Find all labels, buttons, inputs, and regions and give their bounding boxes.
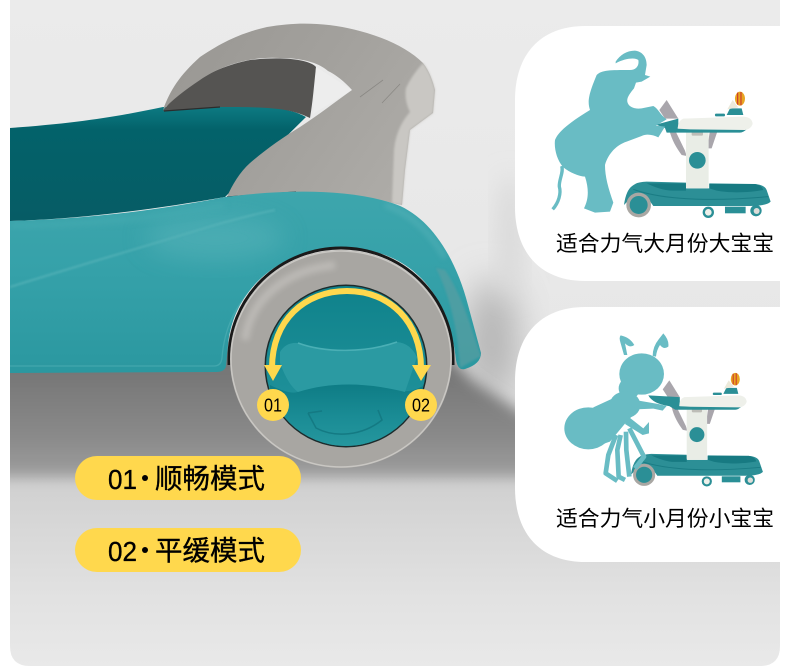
walker product: grey seat back bbox=[163, 24, 435, 205]
label pill: 02 gentle mode: 02 bbox=[108, 536, 137, 567]
label pill: 01 smooth mode bbox=[75, 456, 301, 500]
wheel with mode dial bbox=[229, 248, 453, 468]
caption: ant: 适合力气小月份小宝宝 bbox=[556, 506, 774, 531]
badge: 02 bbox=[405, 389, 437, 421]
walker illustration (large) bbox=[624, 92, 771, 218]
icon: ant silhouette bbox=[564, 333, 668, 481]
label pill: 01 smooth mode: 01 bbox=[108, 464, 137, 495]
badge: 01: 01 bbox=[264, 396, 282, 416]
badge: 01 bbox=[257, 389, 289, 421]
walker product: rear tray interior bbox=[10, 107, 306, 221]
walker product: teal body and fender bbox=[10, 185, 490, 380]
icon: elephant silhouette bbox=[553, 51, 667, 213]
walker illustration (small) bbox=[631, 373, 763, 487]
label pill: 02 gentle mode bbox=[75, 528, 301, 572]
panel: ant card bbox=[515, 307, 780, 562]
label pill: 02 gentle mode: 平缓模式 bbox=[155, 535, 265, 566]
dial hub bbox=[264, 284, 428, 450]
label pill: 01 smooth mode: 顺畅模式 bbox=[155, 463, 265, 494]
panel: elephant card bbox=[515, 26, 780, 281]
caption: elephant: 适合力气大月份大宝宝 bbox=[556, 231, 774, 256]
badge: 02: 02 bbox=[412, 396, 430, 416]
arrow: mode arc bbox=[264, 291, 431, 381]
